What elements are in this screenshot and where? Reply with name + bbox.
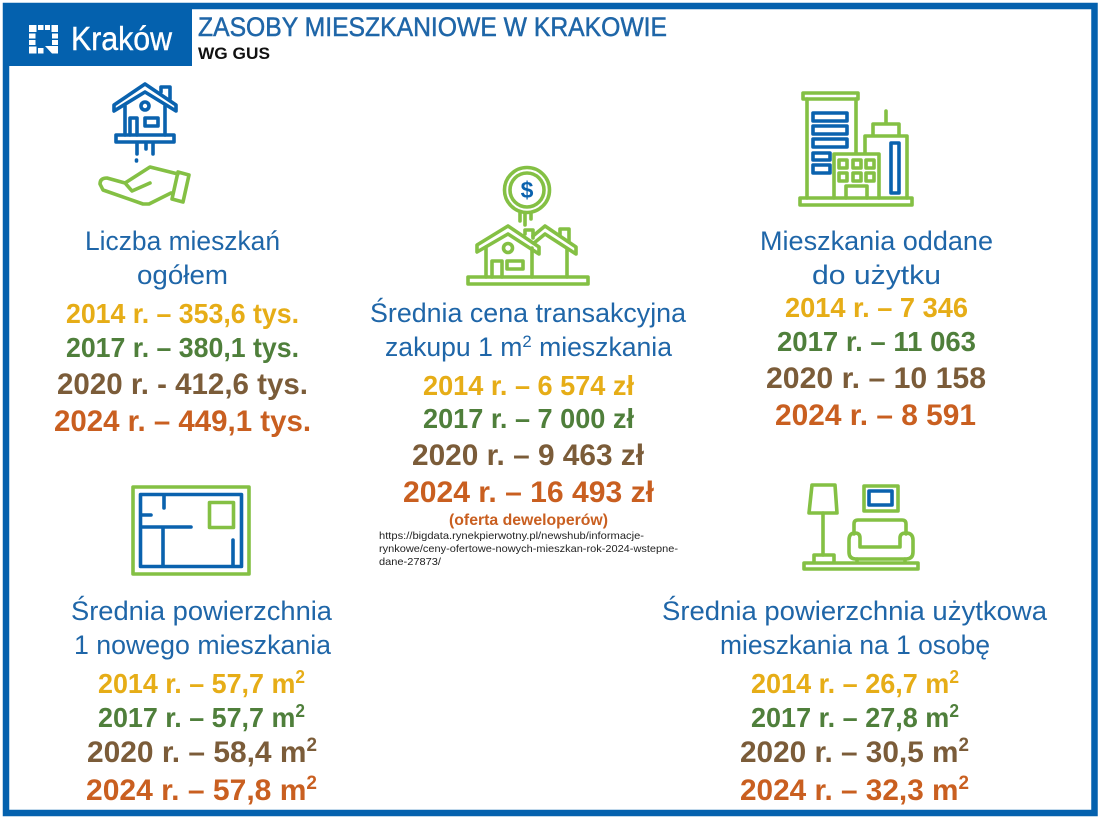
- values: 2017 r. – 7 000 zł: [423, 403, 634, 434]
- values: 2024 r. – 449,1 tys.: [54, 405, 311, 438]
- icon: Kraków logo mark: [29, 25, 58, 54]
- heading: Mieszkania oddane: [760, 226, 993, 256]
- values: 2024 r. – 8 591: [775, 399, 976, 432]
- values: 2020 r. - 412,6 tys.: [57, 368, 308, 401]
- heading: do użytku: [812, 260, 941, 290]
- heading: [85, 226, 280, 290]
- values: [740, 667, 969, 807]
- values: 2017 r. – 11 063: [777, 326, 976, 357]
- values: 2017 r. – 27,8 m: [751, 702, 957, 733]
- source link: rynkowe/ceny-ofertowe-nowych-mieszkan-rok-2024-wstepne-: [379, 543, 679, 555]
- icon: houses with price coin: [468, 168, 588, 284]
- values: 2017 r. – 57,7 m: [98, 702, 304, 733]
- icon: houses with price coin: $: [521, 177, 534, 203]
- values: 2: [306, 773, 317, 794]
- subtitle: WG GUS: [198, 45, 270, 63]
- title: ZASOBY MIESZKANIOWE W KRAKOWIE: [198, 12, 667, 42]
- values: 2: [959, 773, 969, 794]
- heading: zakupu 1 m: [385, 332, 525, 362]
- heading: ogółem: [137, 260, 228, 290]
- panel: number of dwellings: [54, 84, 311, 438]
- values: 2: [959, 735, 969, 756]
- values: 2014 r. – 6 574 zł: [423, 370, 634, 401]
- values: 2020 r. – 30,5 m: [740, 736, 960, 769]
- values: 2014 r. – 353,6 tys.: [66, 298, 299, 329]
- header logo block: [6, 6, 192, 66]
- values: 2: [949, 701, 959, 721]
- values: [86, 667, 317, 807]
- heading: mieszkania na 1 osobę: [720, 630, 990, 660]
- values: 2: [306, 735, 317, 756]
- source link: https://bigdata.rynekpierwotny.pl/newshub/informacje-: [379, 530, 645, 542]
- values: 2014 r. – 57,7 m: [98, 668, 304, 699]
- logo wordmark: Kraków: [71, 20, 172, 57]
- panel: dwellings completed: [760, 93, 993, 432]
- values: 2014 r. – 26,7 m: [751, 668, 957, 699]
- values: 2024 r. – 32,3 m: [740, 774, 960, 807]
- heading: mieszkania: [532, 332, 673, 362]
- panel: usable area per person: [662, 485, 1048, 807]
- heading: [662, 594, 1048, 660]
- values: 2024 r. – 16 493 zł: [403, 476, 655, 509]
- values: 2: [295, 667, 305, 687]
- heading: 2: [522, 332, 532, 351]
- icon: city buildings: [800, 93, 912, 205]
- panel: average transaction price: [370, 168, 687, 568]
- heading: Liczba mieszkań: [85, 226, 280, 256]
- icon: house over hand: [100, 84, 189, 204]
- values: 2: [295, 701, 305, 721]
- heading: 1 nowego mieszkania: [74, 630, 332, 660]
- heading: [71, 594, 333, 660]
- heading: Średnia powierzchnia użytkowa: [662, 594, 1048, 626]
- values: 2020 r. – 9 463 zł: [412, 439, 645, 472]
- heading: [370, 296, 687, 362]
- note: (oferta deweloperów): [449, 512, 608, 529]
- values: [403, 370, 655, 509]
- values: 2024 r. – 57,8 m: [86, 774, 306, 807]
- icon: lamp, picture and sofa: [804, 485, 918, 569]
- values: 2014 r. – 7 346: [785, 292, 968, 323]
- heading: [760, 226, 993, 290]
- heading: Średnia powierzchnia: [71, 594, 333, 626]
- values: [54, 298, 311, 438]
- heading: Średnia cena transakcyjna: [370, 296, 687, 328]
- source link: [379, 530, 679, 568]
- values: 2: [949, 667, 959, 687]
- values: 2020 r. – 58,4 m: [87, 736, 307, 769]
- panel: average new dwelling area: [71, 487, 333, 807]
- values: [766, 292, 986, 432]
- values: 2017 r. – 380,1 tys.: [66, 332, 299, 363]
- icon: floor plan: [133, 487, 249, 574]
- source link: dane-27873/: [379, 556, 441, 568]
- values: 2020 r. – 10 158: [766, 362, 986, 395]
